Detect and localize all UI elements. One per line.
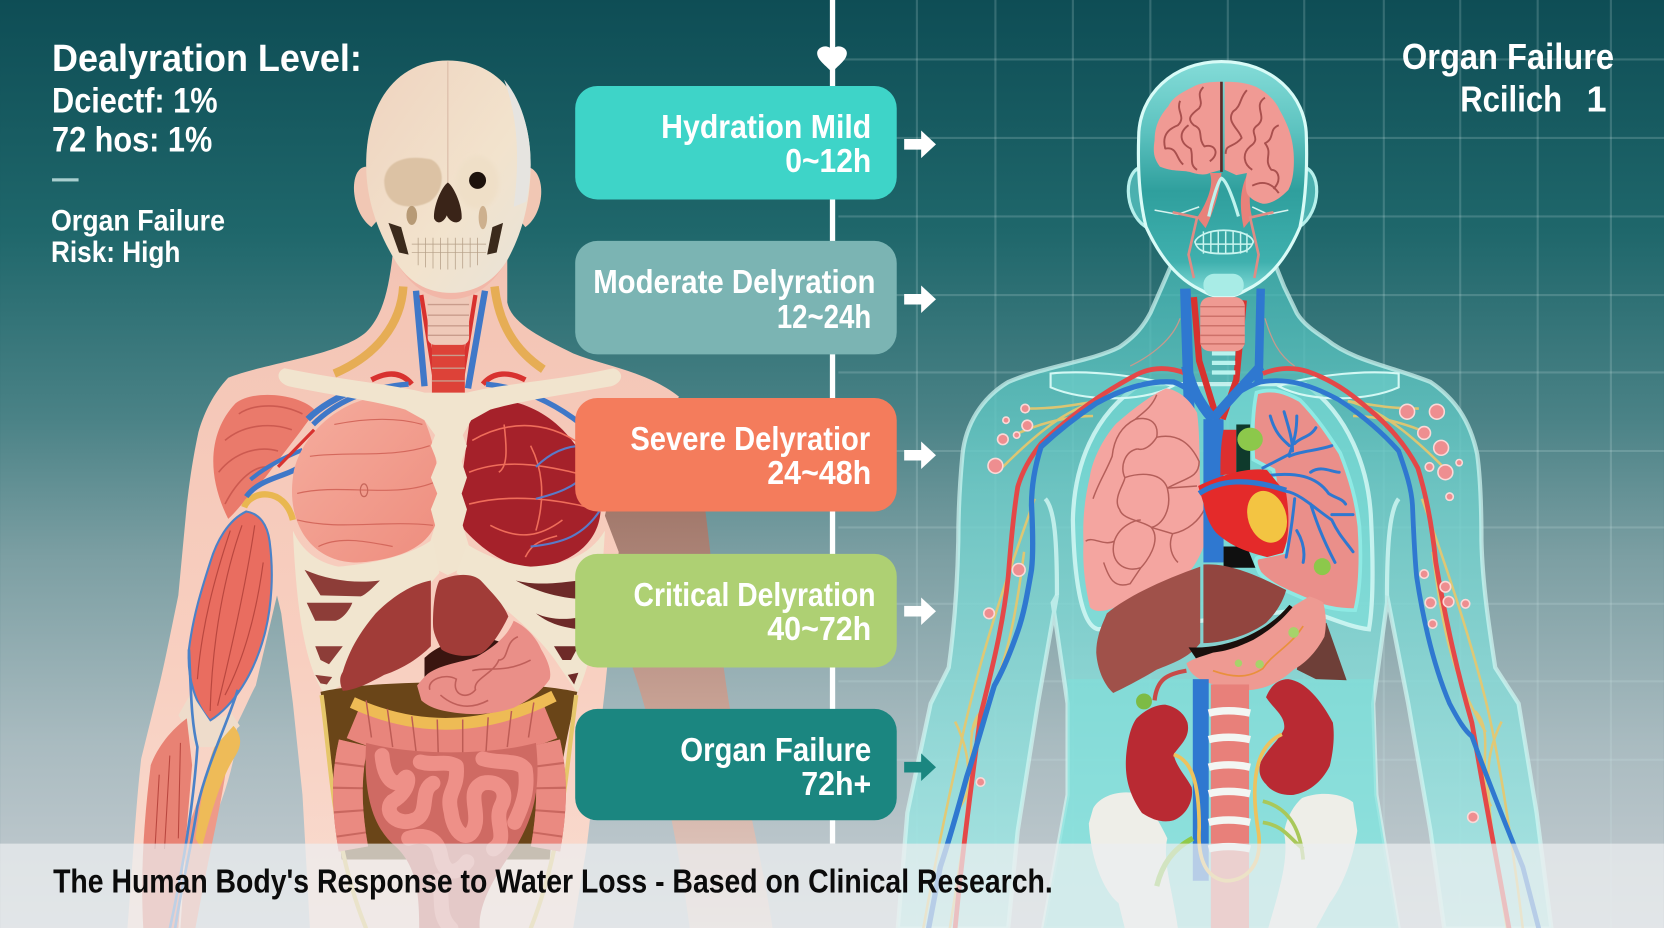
card: severe dehydration — [575, 398, 897, 511]
yellow nerves — [923, 401, 1523, 928]
main arteries and veins — [929, 366, 1539, 928]
center timeline line — [830, 0, 835, 844]
arrow two — [904, 285, 936, 313]
footer caption: The Human Body's Response to Water Loss - Based on Clinical Research. — [53, 862, 1053, 899]
abdominal cavity — [321, 682, 577, 860]
lungs — [1083, 388, 1360, 611]
arrow three — [904, 441, 936, 469]
green lung nodes — [1237, 428, 1331, 575]
card: moderate dehydration: Moderate Delyration — [593, 263, 876, 300]
card: severe dehydration: Severe Delyratior — [630, 420, 870, 457]
risk line two: Risk: High — [51, 236, 180, 269]
card: hydration mild: Hydration Mild — [661, 108, 871, 145]
collar bones and sternum — [279, 368, 621, 575]
card: hydration mild: 0~12h — [785, 142, 871, 179]
spine — [1193, 679, 1250, 928]
pelvis — [1089, 792, 1357, 928]
card: critical dehydration — [575, 554, 897, 667]
deltoid muscle — [213, 395, 315, 519]
icon: heart — [817, 46, 847, 72]
right arm behind cards — [594, 371, 773, 928]
brain — [1154, 82, 1294, 228]
pectoral right — [456, 399, 601, 569]
stomach — [1186, 596, 1326, 690]
small node near liver — [1155, 671, 1186, 700]
card: moderate dehydration — [575, 241, 897, 354]
kidneys — [1126, 679, 1334, 821]
footer band — [0, 844, 1664, 928]
card: hydration mild — [575, 86, 897, 200]
stomach — [417, 621, 550, 714]
trachea — [428, 294, 469, 401]
label number: 1 — [1586, 78, 1607, 119]
card: severe dehydration: 24~48h — [767, 454, 871, 491]
glass body silhouette — [898, 255, 1551, 928]
clavicles — [1051, 372, 1399, 398]
skull — [366, 60, 531, 299]
pink cells — [976, 404, 1478, 822]
hours value: 72 hos: 1% — [52, 121, 212, 160]
pelvic nerves — [1157, 801, 1303, 886]
ears — [1128, 167, 1317, 227]
illustration: translucent anatomical body — [898, 62, 1551, 928]
head — [1138, 62, 1307, 297]
body silhouette — [127, 255, 679, 928]
small intestine — [366, 743, 538, 928]
arrow five — [904, 753, 936, 781]
risk line one: Organ Failure — [51, 204, 225, 237]
card: moderate dehydration: 12~24h — [777, 298, 871, 335]
shadow below liver — [1189, 605, 1297, 663]
card: critical dehydration: Critical Delyration — [634, 576, 876, 613]
face structures — [1155, 178, 1288, 296]
large intestine — [348, 696, 554, 849]
head ears — [354, 167, 541, 227]
deficit value: Dciectf: 1% — [52, 81, 218, 120]
grid on right side — [838, 0, 1664, 928]
rib cage — [293, 531, 605, 695]
top right label — [1402, 36, 1614, 119]
shoulder vessels — [244, 387, 361, 520]
label line one: Organ Failure — [1402, 36, 1614, 77]
short divider — [52, 178, 79, 181]
illustration: opaque anatomical body — [127, 60, 773, 928]
card: organ failure — [575, 709, 897, 820]
heading: Dealyration Level: — [52, 37, 362, 80]
neck vessels — [313, 287, 582, 424]
central trunk and aorta — [1203, 419, 1255, 568]
elbow and forearm muscles — [142, 649, 240, 928]
liver — [340, 575, 508, 691]
card: organ failure: Organ Failure — [680, 731, 871, 768]
heading block: dehydration level — [51, 37, 362, 269]
ureters — [1174, 734, 1282, 881]
label line two: Rcilich — [1460, 78, 1562, 119]
arrow four — [904, 597, 936, 625]
shadow under liver — [425, 638, 520, 700]
liver — [1096, 564, 1347, 693]
biceps muscle — [189, 511, 272, 721]
card: critical dehydration: 40~72h — [767, 610, 871, 647]
heart — [1198, 469, 1293, 557]
arrow one — [904, 131, 936, 158]
card: organ failure: 72h+ — [801, 765, 871, 802]
pectoral left — [292, 396, 440, 563]
trachea and neck vessels — [1130, 289, 1295, 430]
